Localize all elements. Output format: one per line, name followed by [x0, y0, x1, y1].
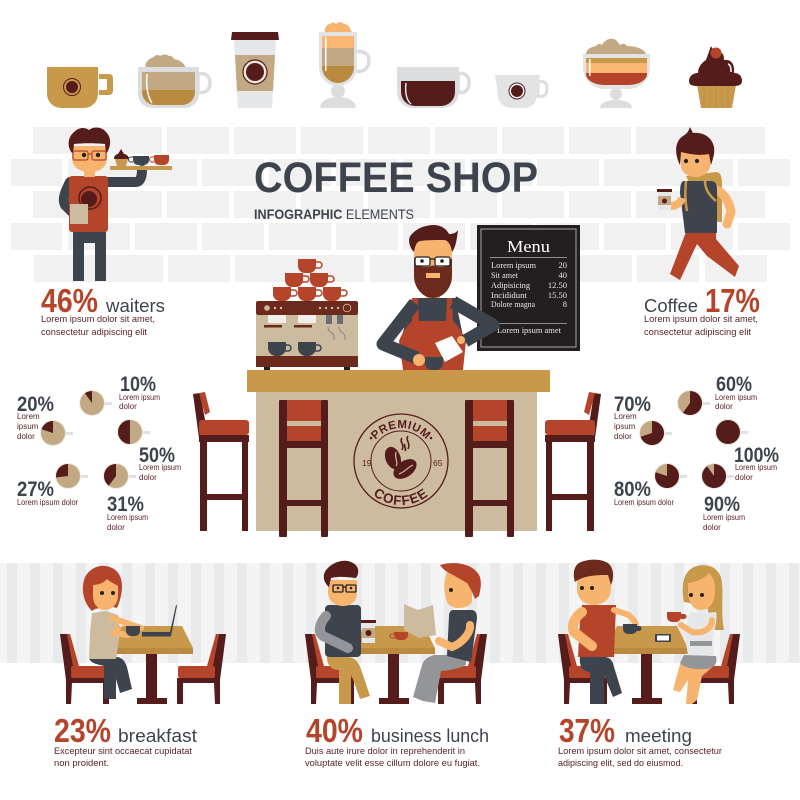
- left side stool: [193, 392, 249, 531]
- stat: meeting: 37%: [559, 712, 615, 749]
- subtitle: INFOGRAPHIC ELEMENTS: [254, 207, 414, 222]
- striped wall band: [0, 563, 800, 663]
- label 70%: Lorem: [614, 412, 637, 421]
- label 10%: dolor: [119, 402, 137, 411]
- stat: coffee: 17%: [705, 282, 760, 319]
- man right pants: [413, 655, 466, 703]
- pie 100%: [715, 419, 748, 445]
- woman arm: [681, 620, 712, 632]
- label 31%: dolor: [107, 523, 125, 532]
- label 10%: Lorem ipsum: [119, 393, 160, 402]
- near arm and cup: [657, 189, 682, 210]
- chalkboard menu: 12.50: [548, 280, 567, 290]
- woman skirt: [680, 655, 717, 669]
- label 100%: dolor: [735, 473, 753, 482]
- chalkboard menu: Adipisicing: [491, 280, 531, 290]
- backpack: [686, 172, 722, 222]
- label 60%: 60%: [716, 373, 752, 396]
- stat: business lunch: Duis aute irure dolor in reprehenderit in: [305, 746, 465, 757]
- pie 90%: [701, 463, 734, 489]
- table: [111, 626, 193, 704]
- stat: breakfast: 23%: [54, 712, 111, 749]
- far arm: [716, 190, 731, 224]
- label 10%: 10%: [120, 373, 156, 396]
- label 90%: Lorem ipsum: [703, 513, 745, 522]
- chalkboard menu: Incididunt: [491, 290, 528, 300]
- label 80%: Lorem ipsum dolor: [614, 498, 674, 507]
- icon: small espresso cup: [495, 75, 547, 108]
- takeaway cup: [361, 620, 376, 643]
- stat: business lunch: 40%: [306, 712, 363, 749]
- cup pyramid: [273, 259, 347, 301]
- pie stats right group: [614, 373, 779, 532]
- label 27%: Lorem ipsum dolor: [17, 498, 78, 507]
- label 27%: [17, 478, 78, 507]
- right chair: [691, 634, 740, 704]
- stat: meeting: adipiscing elit, sed do eiusmod.: [558, 758, 683, 769]
- icon: latte glass: [138, 54, 210, 108]
- counter: [247, 370, 550, 531]
- label 90%: [703, 493, 745, 532]
- woman legs: [673, 664, 716, 704]
- brick wall background: [11, 127, 790, 282]
- right chair: [177, 634, 226, 704]
- paper: [435, 336, 463, 362]
- arm: [112, 618, 141, 635]
- label 60%: Lorem ipsum: [715, 393, 757, 402]
- label 50%: 50%: [139, 444, 175, 467]
- label 20%: Lorem: [17, 412, 40, 421]
- stat: coffee: consectetur adipiscing elit: [644, 327, 751, 338]
- front stool right: [465, 400, 514, 537]
- man right head: [440, 563, 481, 608]
- chalkboard menu: [477, 225, 580, 351]
- icon: takeaway cup: [231, 32, 279, 108]
- icon: layered dessert glass: [583, 39, 650, 108]
- legs: [73, 232, 106, 281]
- stat: waiters: 46%: [41, 282, 98, 319]
- label 70%: 70%: [614, 393, 651, 416]
- man right torso: [447, 610, 477, 662]
- label 31%: [107, 493, 148, 532]
- orange mug: [390, 632, 408, 640]
- tray with items: [110, 149, 172, 170]
- pie 27%: [55, 463, 88, 489]
- right chair: [438, 634, 487, 704]
- torso: [402, 298, 463, 336]
- chalkboard menu: Menu: [507, 237, 551, 256]
- chalkboard menu: 15.50: [548, 290, 567, 300]
- stat: breakfast: Excepteur sint occaecat cupidatat: [54, 746, 192, 757]
- stat: breakfast: [54, 712, 197, 769]
- label 31%: 31%: [107, 493, 144, 516]
- woman face: [688, 573, 715, 610]
- icon: black coffee cup: [397, 67, 469, 108]
- label 20%: dolor: [17, 432, 35, 441]
- mug: [126, 626, 140, 636]
- man left pants: [327, 657, 370, 704]
- front stool left: [279, 400, 328, 537]
- woman belt: [690, 641, 712, 646]
- pie 70%: [639, 420, 672, 446]
- chalkboard menu: Lorem ipsum: [491, 260, 536, 270]
- left chair: [305, 634, 354, 704]
- label 31%: Lorem ipsum: [107, 513, 148, 522]
- phone: [655, 634, 671, 642]
- pie 20%: [40, 420, 73, 446]
- table: [606, 626, 688, 704]
- man left arm: [320, 616, 348, 648]
- label 60%: dolor: [715, 402, 733, 411]
- pie 50%: [117, 419, 150, 445]
- chalkboard menu: 40: [558, 270, 567, 280]
- laptop: [142, 605, 177, 636]
- pie 80%: [654, 463, 687, 489]
- head: [83, 566, 122, 611]
- label 20%: ipsum: [17, 422, 39, 431]
- right side stool: [545, 392, 601, 531]
- badge: premium coffee logo: PREMIUM: [370, 420, 431, 440]
- scene: woman with laptop at table: [60, 566, 226, 704]
- stat: business lunch: [305, 712, 489, 769]
- label 90%: 90%: [704, 493, 740, 516]
- stat: waiters: Lorem ipsum dolor sit amet,: [41, 314, 155, 325]
- arms: [64, 170, 142, 213]
- stat: breakfast: non proident.: [54, 758, 109, 769]
- arms: [383, 302, 493, 358]
- label 80%: [614, 478, 674, 507]
- man pants: [580, 657, 622, 704]
- label 60%: [715, 373, 757, 411]
- label 20%: 20%: [17, 393, 54, 416]
- badge: premium coffee logo: [353, 413, 449, 509]
- stat: waiters: [41, 282, 165, 338]
- torso: [89, 611, 120, 659]
- scene: meeting man and woman: [558, 560, 740, 704]
- stat: meeting: [558, 712, 722, 769]
- label 50%: dolor: [139, 473, 157, 482]
- head: [69, 128, 110, 177]
- pants: [670, 232, 739, 280]
- stat: business lunch: business lunch: [371, 726, 489, 746]
- apron: [399, 298, 466, 370]
- woman hair: [683, 565, 724, 630]
- head: [409, 225, 458, 298]
- stat: coffee: [644, 282, 760, 338]
- legs: [89, 657, 132, 699]
- label 100%: [734, 444, 779, 482]
- label 100%: Lorem ipsum: [735, 463, 777, 472]
- figure: waiter with tray: [64, 128, 172, 281]
- title: COFFEE SHOP: [254, 154, 538, 202]
- woman eyes: [689, 593, 704, 597]
- stat: waiters: waiters: [105, 296, 165, 316]
- left chair: [60, 634, 109, 704]
- stat: meeting: meeting: [625, 726, 692, 746]
- badge: premium coffee logo: 19: [362, 458, 372, 468]
- straps: [685, 181, 716, 211]
- label 27%: 27%: [17, 478, 54, 501]
- label 80%: 80%: [614, 478, 651, 501]
- chalkboard menu: Lorem ipsum amet: [497, 325, 562, 335]
- table: [353, 626, 435, 704]
- grey mug: [623, 624, 642, 634]
- pie 31%: [103, 463, 136, 489]
- label 20%: [17, 393, 54, 441]
- stat: breakfast: breakfast: [118, 726, 197, 746]
- espresso machine: [256, 301, 358, 371]
- badge: premium coffee logo: COFFEE: [374, 488, 428, 506]
- label 100%: 100%: [734, 444, 779, 467]
- label 50%: [139, 444, 181, 482]
- orange mug: [667, 612, 686, 622]
- label 70%: dolor: [614, 432, 632, 441]
- head: [676, 127, 714, 177]
- torso: [69, 176, 108, 232]
- scene: business lunch two men: [305, 561, 487, 704]
- man arms: [573, 610, 636, 646]
- icon: irish coffee glass: [319, 22, 369, 108]
- chalkboard menu: 8: [563, 299, 567, 309]
- man head: [574, 560, 613, 605]
- stat: coffee: Lorem ipsum dolor sit amet,: [644, 314, 758, 325]
- label 70%: ipsum: [614, 422, 636, 431]
- icon: cupcake: [689, 46, 742, 108]
- woman torso: [684, 612, 717, 655]
- chalkboard menu: Sit amet: [491, 270, 519, 280]
- chalkboard menu: 20: [558, 260, 567, 270]
- man left head: [324, 561, 358, 606]
- pie 60%: [677, 390, 710, 416]
- icon row: cups and cupcake: [47, 22, 742, 108]
- pie 10%: [79, 390, 112, 416]
- stat: meeting: Lorem ipsum dolor sit amet, consectetur: [558, 746, 722, 757]
- man torso: [578, 605, 616, 657]
- stat: coffee: Coffee: [644, 296, 698, 316]
- stat: business lunch: voluptate velit esse cillum dolore eu fugiat.: [305, 758, 480, 769]
- label 90%: dolor: [703, 523, 721, 532]
- chalkboard menu: Dolore magna: [491, 299, 535, 309]
- label 70%: [614, 393, 651, 441]
- man left torso: [325, 605, 361, 657]
- torso: [680, 181, 717, 233]
- figure: walking man with backpack: [657, 127, 739, 280]
- icon: gold mug: [47, 67, 113, 108]
- label 10%: [119, 373, 160, 411]
- paper menu: [404, 604, 436, 638]
- stat: waiters: consectetur adipiscing elit: [41, 327, 147, 338]
- pie stats left group: [17, 373, 181, 532]
- hands and mug: [413, 336, 465, 370]
- left chair: [558, 634, 607, 704]
- label 50%: Lorem ipsum: [139, 463, 181, 472]
- figure: barista: [383, 225, 493, 370]
- badge: premium coffee logo: 65: [433, 458, 443, 468]
- man right arm: [439, 625, 470, 647]
